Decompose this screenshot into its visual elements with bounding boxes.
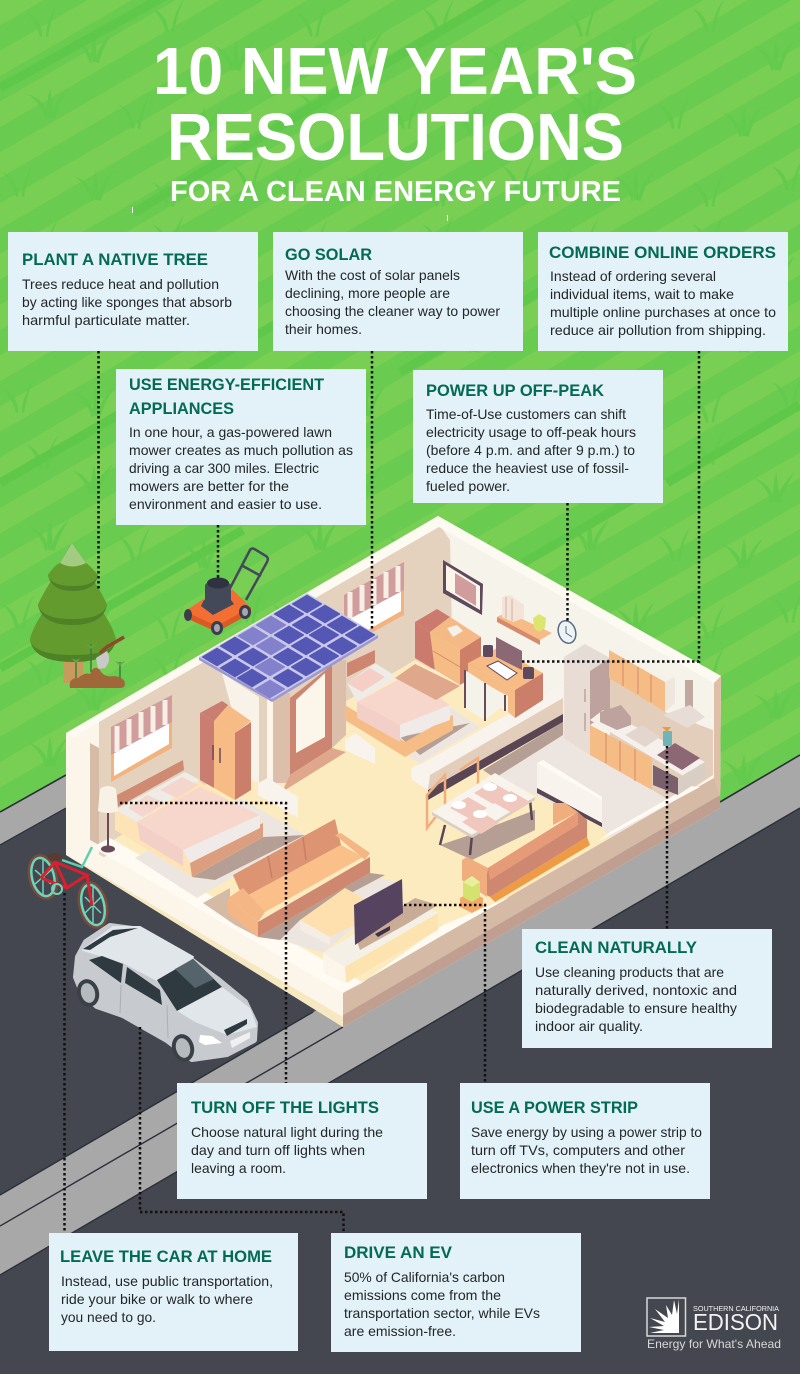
corner shadow on right wall [439, 524, 452, 650]
upper left sidewalk strip [0, 774, 66, 845]
panel: turn off the lights: day and turn off lights when [191, 1142, 365, 1158]
outer footprint [66, 516, 721, 1027]
panel: turn off the lights [177, 1083, 427, 1199]
front right wall highlights [345, 786, 700, 992]
panel: power up off-peak [413, 370, 663, 503]
sofa left [228, 819, 370, 937]
solar panel [199, 593, 378, 702]
kitchen fridge [564, 644, 610, 755]
lower sidewalk strip [0, 728, 800, 1275]
left end column [90, 743, 99, 845]
panel: use a power strip: Save energy by using a power strip to [471, 1124, 702, 1140]
connector: bicycle [63, 893, 66, 1233]
panel: clean naturally: CLEAN NATURALLY [535, 938, 698, 957]
connector: tree [97, 351, 100, 591]
door wall with door [222, 660, 346, 792]
title: FOR A CLEAN ENERGY FUTURE [170, 176, 621, 208]
panel: power up off-peak: reduce the heaviest use of fossil- [426, 460, 629, 476]
panel: go solar: With the cost of solar panels [285, 267, 460, 283]
house shell [66, 516, 721, 1027]
title: 10 NEW YEAR'S [153, 34, 637, 109]
connector: online orders [522, 351, 699, 662]
front left foundation [66, 855, 343, 1027]
panel: use a power strip: USE A POWER STRIP [471, 1098, 638, 1117]
back left wall face [99, 524, 439, 860]
connector: spray bottle [666, 746, 668, 929]
kitchen upper cabinets and hood [609, 644, 705, 728]
panel: use energy-efficient appliances [116, 369, 366, 525]
small heater left [258, 778, 298, 817]
logo: southern california edison: SOUTHERN CALIFORNIA [693, 1306, 779, 1313]
panel: go solar: declining, more people are [285, 285, 450, 301]
icon: television [354, 879, 403, 945]
lawn background with grass [0, 0, 800, 812]
connector: clock [566, 503, 569, 622]
rooms: partition wall [411, 682, 563, 800]
panel: use energy-efficient appliances: mowers are better for the [129, 478, 289, 494]
panel: combine online orders: reduce air pollution from shipping. [550, 322, 766, 338]
logo: southern california edison: EDISON [693, 1309, 778, 1335]
panel: leave the car at home: Instead, use public transportation, [61, 1273, 273, 1289]
panel: use a power strip: turn off TVs, computers and other [471, 1142, 685, 1158]
front right wall face [343, 778, 721, 1015]
icon: bicycle [25, 847, 112, 931]
panel: drive an ev: are emission-free. [344, 1323, 456, 1339]
panel: power up off-peak: Time-of-Use customers can shift [426, 406, 626, 422]
main floor [110, 660, 672, 982]
panel: clean naturally: naturally derived, nontoxic and [535, 982, 737, 998]
icon: spray bottle [662, 727, 672, 746]
kitchen counter, sink, stove [590, 705, 705, 795]
desk with computer and chair [465, 637, 543, 721]
panel: power up off-peak: POWER UP OFF-PEAK [426, 381, 605, 400]
wardrobe [200, 701, 251, 800]
connector: mower [217, 525, 219, 578]
icon: floor lamp [98, 786, 118, 852]
kitchen floor [483, 722, 672, 838]
panel: go solar: their homes. [285, 321, 362, 337]
sofa right [462, 803, 590, 902]
front right foundation [343, 795, 720, 1027]
panel: turn off the lights: Choose natural light during the [191, 1124, 383, 1140]
living room rug [203, 873, 405, 953]
connector: power strip [404, 905, 485, 1083]
panel: combine online orders: Instead of ordering several [550, 268, 716, 284]
panel: use a power strip [460, 1083, 710, 1199]
icon: lawn mower [184, 548, 268, 635]
panel: combine online orders: multiple online purchases at once to [550, 304, 776, 320]
icon: air purifier box [460, 876, 483, 913]
panel: turn off the lights: TURN OFF THE LIGHTS [191, 1098, 379, 1117]
panel: combine online orders [538, 232, 788, 351]
wall caps [66, 516, 721, 738]
front left wall face [88, 848, 343, 1017]
left bedroom rug and bed [115, 760, 305, 898]
panel: plant a native tree: Trees reduce heat and pollution [22, 276, 219, 292]
panel: go solar [273, 232, 523, 351]
connector: car [140, 1027, 344, 1233]
panel: use energy-efficient appliances: mower creates as much pollution as [129, 442, 353, 458]
coffee table [300, 888, 385, 945]
panel: turn off the lights: leaving a room. [191, 1160, 286, 1176]
connector: lamp [120, 803, 286, 1083]
panel: leave the car at home [49, 1233, 298, 1351]
icon: car [74, 926, 257, 1064]
panel: drive an ev: transportation sector, while EVs [344, 1305, 540, 1321]
right wall end [714, 676, 721, 797]
title [153, 34, 637, 208]
shelf with books and box [497, 595, 552, 645]
title: RESOLUTIONS [167, 100, 624, 175]
panel: drive an ev [331, 1233, 581, 1352]
panel: plant a native tree: PLANT A NATIVE TREE [22, 250, 208, 269]
panel: leave the car at home: ride your bike or walk to where [61, 1291, 253, 1307]
panel: clean naturally: indoor air quality. [535, 1018, 643, 1034]
panel: leave the car at home: you need to go. [61, 1309, 156, 1325]
front left wall top [92, 838, 362, 993]
panel: combine online orders: individual items, wait to make [550, 286, 734, 302]
small heater right bedroom [345, 733, 375, 764]
kitchen backsplash [610, 678, 713, 802]
panel: plant a native tree [8, 232, 258, 351]
panel: drive an ev: 50% of California's carbon [344, 1269, 505, 1285]
icon: pine tree with shovel and sprouts [30, 543, 125, 688]
panel: use energy-efficient appliances: USE ENERGY-EFFICIENT [129, 375, 325, 394]
tv console [323, 898, 438, 983]
dresser [395, 609, 481, 700]
panel: drive an ev: DRIVE AN EV [344, 1243, 453, 1262]
panel: use energy-efficient appliances: APPLIANCES [129, 399, 234, 418]
bedroom window left [111, 695, 172, 782]
panel: combine online orders: COMBINE ONLINE ORDERS [549, 243, 776, 262]
panel: use a power strip: electronics when they're not in use. [471, 1160, 690, 1176]
logo: southern california edison [647, 1298, 781, 1351]
connector: solar [371, 351, 373, 630]
right bedroom: rug and bed [345, 650, 480, 763]
panel: power up off-peak: fueled power. [426, 478, 510, 494]
panel: power up off-peak: electricity usage to off-peak hours [426, 424, 636, 440]
panel: use energy-efficient appliances: environment and easier to use. [129, 496, 322, 512]
panel: clean naturally: biodegradable to ensure healthy [535, 1000, 737, 1016]
panel: use energy-efficient appliances: driving a car 300 miles. Electric [129, 460, 319, 476]
panel: use energy-efficient appliances: In one hour, a gas-powered lawn [129, 424, 332, 440]
panel: plant a native tree: by acting like sponges that absorb [22, 294, 232, 310]
panel: power up off-peak: (before 4 p.m. and after 9 p.m.) to [426, 442, 635, 458]
logo: southern california edison: Energy for What's Ahead [647, 1337, 781, 1351]
panel: clean naturally [522, 929, 772, 1048]
panel: leave the car at home: LEAVE THE CAR AT HOME [60, 1247, 272, 1266]
panel: go solar: choosing the cleaner way to power [285, 303, 500, 319]
dining bench [537, 760, 602, 827]
dining table with chairs [427, 758, 535, 860]
panel: plant a native tree: harmful particulate matter. [22, 312, 190, 328]
icon: wall clock [555, 618, 579, 646]
panel: go solar: GO SOLAR [285, 245, 372, 264]
bedroom window right [344, 562, 404, 648]
panel: clean naturally: Use cleaning products that are [535, 964, 724, 980]
back right wall face [439, 524, 714, 802]
picture frame [443, 560, 483, 615]
panel: drive an ev: emissions come from the [344, 1287, 501, 1303]
